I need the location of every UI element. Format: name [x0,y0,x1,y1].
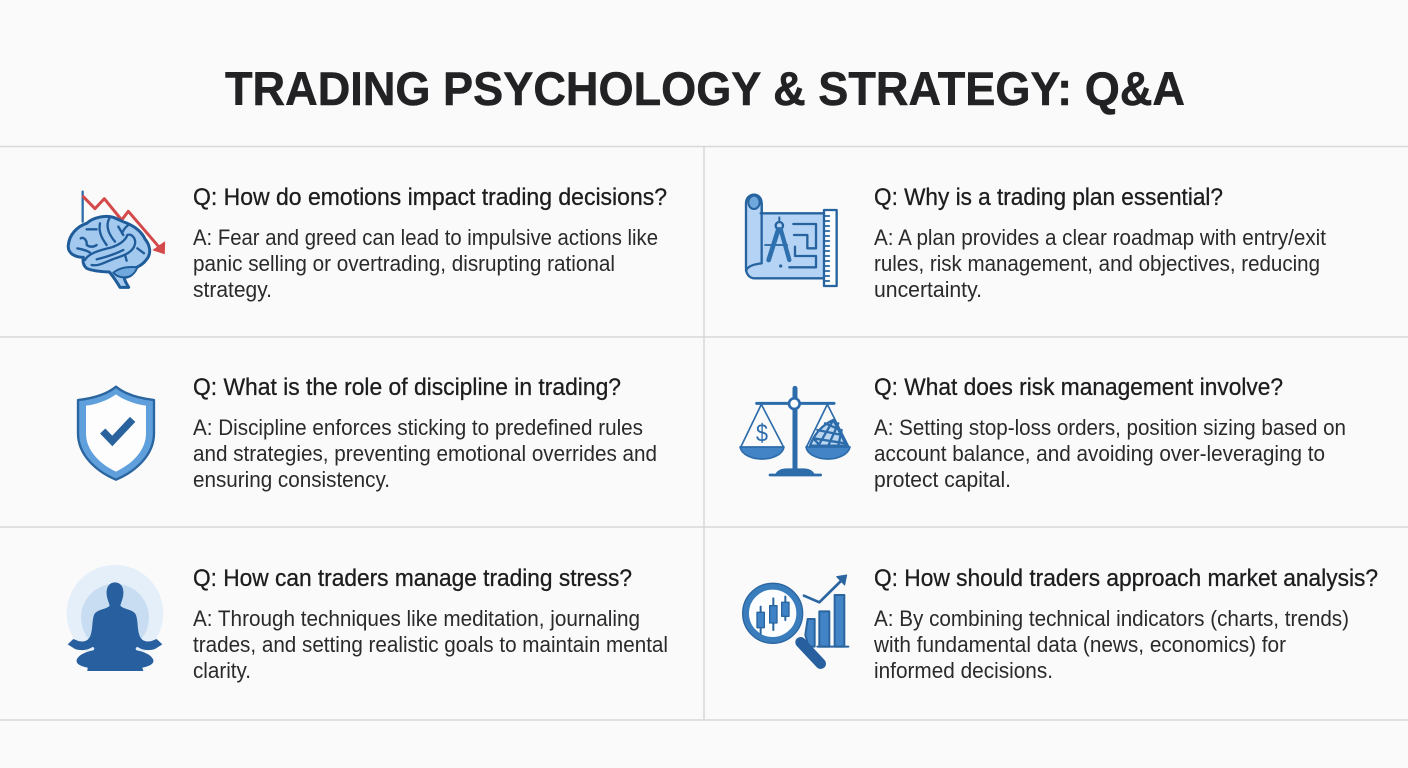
panel: stress [67,565,668,683]
panel: risk management [740,374,1346,492]
answer: trades, and setting realistic goals to maintain mental [193,632,668,657]
answer [193,606,668,683]
icon: balance scale with dollar and net [740,388,850,475]
answer: A: Fear and greed can lead to impulsive actions like [193,225,658,250]
answer: informed decisions. [874,658,1053,683]
answer: clarity. [193,658,251,683]
question: Q: How should traders approach market analysis? [874,565,1378,592]
icon: magnifier over candlesticks and rising bars [743,575,848,664]
question: Q: What is the role of discipline in trading? [193,374,621,401]
answer: A: Discipline enforces sticking to predefined rules [193,415,643,440]
question: Q: Why is a trading plan essential? [874,184,1223,211]
question: Q: How can traders manage trading stress? [193,565,632,592]
icon: meditating figure with halo [67,565,163,671]
question: Q: How do emotions impact trading decisions? [193,184,667,211]
answer: panic selling or overtrading, disrupting rational [193,251,615,276]
answer: with fundamental data (news, economics) for [873,632,1286,657]
answer: account balance, and avoiding over-leveraging to [874,441,1325,466]
answer: ensuring consistency. [193,467,390,492]
icon: shield with check mark [78,387,154,480]
answer: A: A plan provides a clear roadmap with entry/exit [874,225,1326,250]
answer: strategy. [193,277,272,302]
panel: emotions [68,184,667,302]
answer: A: Setting stop-loss orders, position sizing based on [874,415,1346,440]
panel: trading plan [746,184,1326,302]
title: TRADING PSYCHOLOGY & STRATEGY: Q&A [225,62,1185,115]
answer: A: By combining technical indicators (charts, trends) [874,606,1349,631]
answer [873,606,1349,683]
answer [193,415,657,492]
panel: discipline [78,374,657,492]
icon: balance scale with dollar and net: $ [756,421,768,448]
answer: uncertainty. [874,277,982,302]
answer: and strategies, preventing emotional overrides and [193,441,657,466]
icon: blueprint with compass and ruler [746,195,837,286]
icon: brain with falling chart arrow [68,192,165,287]
answer [874,415,1346,492]
panel: market analysis [743,565,1378,683]
answer [193,225,658,302]
question: Q: What does risk management involve? [874,374,1283,401]
answer: protect capital. [874,467,1011,492]
answer: rules, risk management, and objectives, reducing [874,251,1320,276]
answer: A: Through techniques like meditation, journaling [193,606,640,631]
answer [874,225,1326,302]
